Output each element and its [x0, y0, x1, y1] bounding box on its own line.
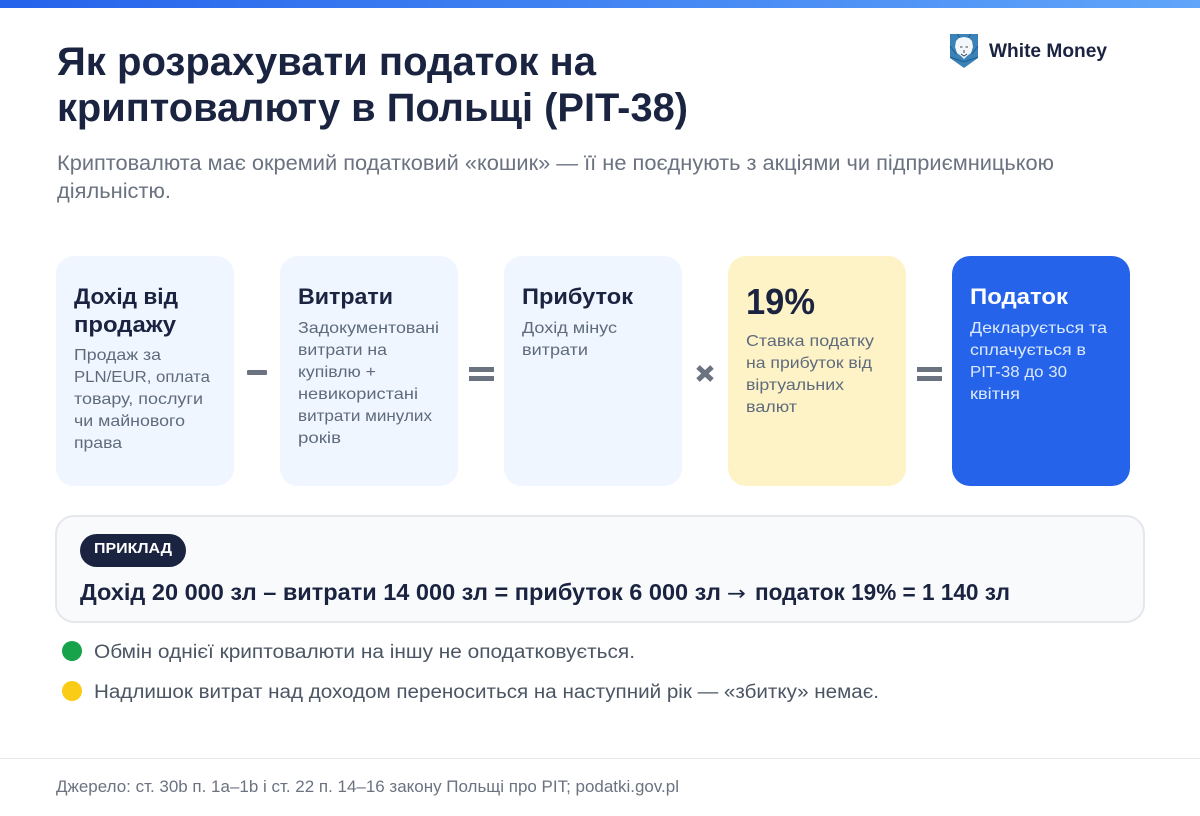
subtitle: діяльністю.	[57, 180, 171, 203]
text: tax description	[970, 320, 1107, 403]
subtitle: Криптовалюта має окремий податковий «кошик» — її не поєднують з акціями чи підприємницькою	[57, 152, 1054, 175]
text: expenses description: витрати на	[298, 342, 387, 359]
text: income description: Продаж за	[74, 347, 161, 364]
icon: yellow dot	[62, 681, 82, 701]
heading: expenses: Витрати	[298, 284, 393, 309]
text: income description	[74, 347, 210, 452]
title	[57, 40, 688, 130]
text: rate description: Ставка податку	[746, 333, 874, 350]
text: expenses description: років	[298, 430, 341, 447]
panel: income	[56, 256, 234, 486]
example calculation: →	[727, 581, 746, 605]
text: expenses description: невикористані	[298, 386, 418, 403]
text: tax description: Декларується та	[970, 320, 1107, 337]
example calculation	[80, 579, 1010, 605]
operator: equals	[917, 367, 942, 381]
panel: expenses	[280, 256, 458, 486]
title: криптовалюту в Польщі (PIT-38)	[57, 86, 688, 130]
text: tax description: квітня	[970, 386, 1020, 403]
panel: profit	[504, 256, 682, 486]
text: profit description: Дохід мінус	[522, 320, 617, 337]
text: expenses description: купівлю +	[298, 364, 376, 381]
text: tax description: сплачується в	[970, 342, 1086, 359]
source: Джерело: ст. 30b п. 1a–1b і ст. 22 п. 14–16 закону Польщі про PIT; podatki.gov.pl	[56, 778, 679, 796]
operator: equals	[469, 367, 494, 381]
note: excess costs: Надлишок витрат над доходом переноситься на наступний рік — «збитку» немає.	[94, 682, 879, 703]
note: crypto exchange: Обмін однієї криптовалюти на іншу не оподатковується.	[94, 642, 635, 663]
text: profit description: витрати	[522, 342, 588, 359]
text: rate description: на прибуток від	[746, 355, 873, 372]
text: rate description	[746, 333, 874, 416]
text: rate description: валют	[746, 399, 798, 416]
title: Як розрахувати податок на	[57, 40, 597, 84]
text: expenses description: Задокументовані	[298, 320, 439, 337]
logo wordmark: White Money	[989, 41, 1107, 62]
panel: tax	[952, 256, 1130, 486]
badge: example: ПРИКЛАД	[94, 540, 172, 557]
example calculation: Дохід 20 000 зл – витрати 14 000 зл = прибуток 6 000 зл	[80, 579, 721, 605]
heading: profit: Прибуток	[522, 284, 634, 309]
icon: lion shield	[950, 34, 978, 68]
operator: minus	[247, 370, 267, 375]
text: tax description: PIT-38 до 30	[970, 364, 1067, 381]
subtitle	[57, 152, 1054, 203]
heading: rate: 19%	[746, 281, 815, 322]
heading: income: продажу	[74, 312, 177, 337]
icon: green dot	[62, 641, 82, 661]
top gradient bar	[0, 0, 1200, 8]
heading: income	[74, 284, 178, 337]
heading: tax: Податок	[970, 284, 1069, 309]
text: income description: права	[74, 435, 122, 452]
text: expenses description	[298, 320, 439, 447]
heading: income: Дохід від	[74, 284, 178, 309]
operator: multiply	[698, 367, 712, 380]
text: profit description	[522, 320, 617, 359]
badge: example	[80, 534, 186, 567]
text: income description: PLN/EUR, оплата	[74, 369, 210, 386]
panel: example	[56, 516, 1144, 622]
logo: White Money	[950, 34, 1107, 68]
text: expenses description: витрати минулих	[298, 408, 432, 425]
text: rate description: віртуальних	[746, 377, 844, 394]
example calculation: податок 19% = 1 140 зл	[755, 579, 1010, 605]
text: income description: чи майнового	[74, 413, 185, 430]
panel: rate	[728, 256, 906, 486]
text: income description: товару, послуги	[74, 391, 203, 408]
